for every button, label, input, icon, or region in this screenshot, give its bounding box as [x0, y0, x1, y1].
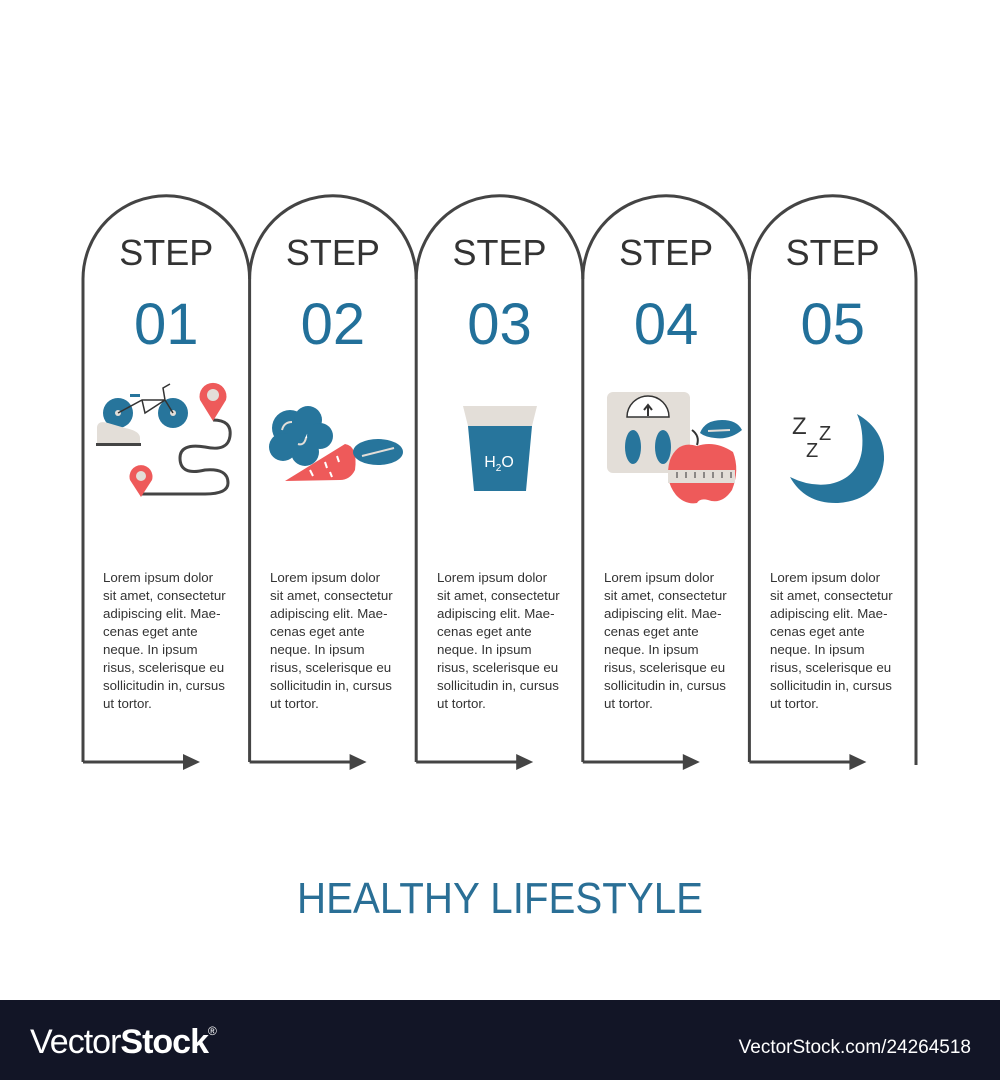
- text block 2: risus, scelerisque eu: [270, 660, 391, 675]
- panel: step 01: [83, 196, 250, 770]
- icon: scale and apple: [607, 392, 742, 503]
- number 04: 04: [634, 292, 698, 357]
- title: HEALTHY LIFESTYLE: [297, 874, 703, 923]
- text block 1: sollicitudin in, cursus: [103, 678, 225, 693]
- text block 2: ut tortor.: [270, 696, 319, 711]
- text block 3: Lorem ipsum dolor: [437, 570, 548, 585]
- icon: water glass: H: [484, 454, 496, 471]
- text block 2: neque. In ipsum: [270, 642, 365, 657]
- panel: step 04: [583, 196, 749, 770]
- text block 4: sollicitudin in, cursus: [604, 678, 726, 693]
- text block 1: sit amet, consectetur: [103, 588, 226, 603]
- footer logo: ®: [208, 1024, 217, 1038]
- text block 3: risus, scelerisque eu: [437, 660, 558, 675]
- text block 5: adipiscing elit. Mae-: [770, 606, 888, 621]
- heading: step 02: STEP: [286, 232, 380, 273]
- arrow 4: [683, 754, 700, 770]
- text block 2: cenas eget ante: [270, 624, 365, 639]
- icon: water glass: [463, 406, 537, 491]
- text block 5: risus, scelerisque eu: [770, 660, 891, 675]
- number 02: 02: [301, 292, 365, 357]
- text block 4: adipiscing elit. Mae-: [604, 606, 722, 621]
- text block 1: neque. In ipsum: [103, 642, 198, 657]
- text block 4: sit amet, consectetur: [604, 588, 727, 603]
- text block 3: sollicitudin in, cursus: [437, 678, 559, 693]
- text block 3: adipiscing elit. Mae-: [437, 606, 555, 621]
- icon: moon and zzz: Z: [806, 440, 818, 462]
- arrow 2: [350, 754, 367, 770]
- footer logo: VectorStock: [30, 1023, 208, 1061]
- heading: step 05: STEP: [786, 232, 880, 273]
- text block 5: Lorem ipsum dolor: [770, 570, 881, 585]
- text block 5: neque. In ipsum: [770, 642, 865, 657]
- icon: water glass: O: [501, 454, 514, 471]
- text block 3: ut tortor.: [437, 696, 486, 711]
- arrow 1: [183, 754, 200, 770]
- arrow 5: [849, 754, 866, 770]
- footer url: VectorStock.com/24264518: [739, 1037, 971, 1058]
- number 03: 03: [467, 292, 532, 357]
- icon: vegetables: [269, 406, 403, 481]
- panel: step 03: [416, 196, 583, 770]
- panel: step 05: [749, 196, 916, 770]
- icon: bike route: [96, 383, 230, 497]
- icon: moon and zzz: Z: [792, 413, 807, 440]
- heading: step 03: STEP: [452, 232, 547, 273]
- text block 2: sit amet, consectetur: [270, 588, 393, 603]
- text block 3: cenas eget ante: [437, 624, 532, 639]
- text block 2: adipiscing elit. Mae-: [270, 606, 388, 621]
- text block 1: risus, scelerisque eu: [103, 660, 224, 675]
- text block 4: neque. In ipsum: [604, 642, 699, 657]
- text block 4: risus, scelerisque eu: [604, 660, 725, 675]
- heading: step 01: STEP: [119, 232, 213, 273]
- text block 4: ut tortor.: [604, 696, 653, 711]
- panel: step 02: [250, 196, 416, 770]
- text block 3: sit amet, consectetur: [437, 588, 560, 603]
- text block 5: sit amet, consectetur: [770, 588, 893, 603]
- text block 3: neque. In ipsum: [437, 642, 532, 657]
- icon: moon and zzz: [790, 413, 884, 503]
- footer bar: [0, 1000, 1000, 1080]
- text block 5: ut tortor.: [770, 696, 819, 711]
- text block 5: sollicitudin in, cursus: [770, 678, 892, 693]
- text block 1: Lorem ipsum dolor: [103, 570, 214, 585]
- text block 1: ut tortor.: [103, 696, 152, 711]
- text block 2: Lorem ipsum dolor: [270, 570, 381, 585]
- text block 5: cenas eget ante: [770, 624, 865, 639]
- text block 2: sollicitudin in, cursus: [270, 678, 392, 693]
- heading: step 04: STEP: [619, 232, 713, 273]
- arrow 3: [516, 754, 533, 770]
- icon: moon and zzz: Z: [819, 423, 831, 445]
- text block 4: cenas eget ante: [604, 624, 699, 639]
- text block 4: Lorem ipsum dolor: [604, 570, 715, 585]
- number 01: 01: [134, 292, 199, 357]
- icon: water glass: 2: [496, 463, 502, 474]
- number 05: 05: [800, 292, 865, 357]
- text block 1: adipiscing elit. Mae-: [103, 606, 221, 621]
- text block 1: cenas eget ante: [103, 624, 198, 639]
